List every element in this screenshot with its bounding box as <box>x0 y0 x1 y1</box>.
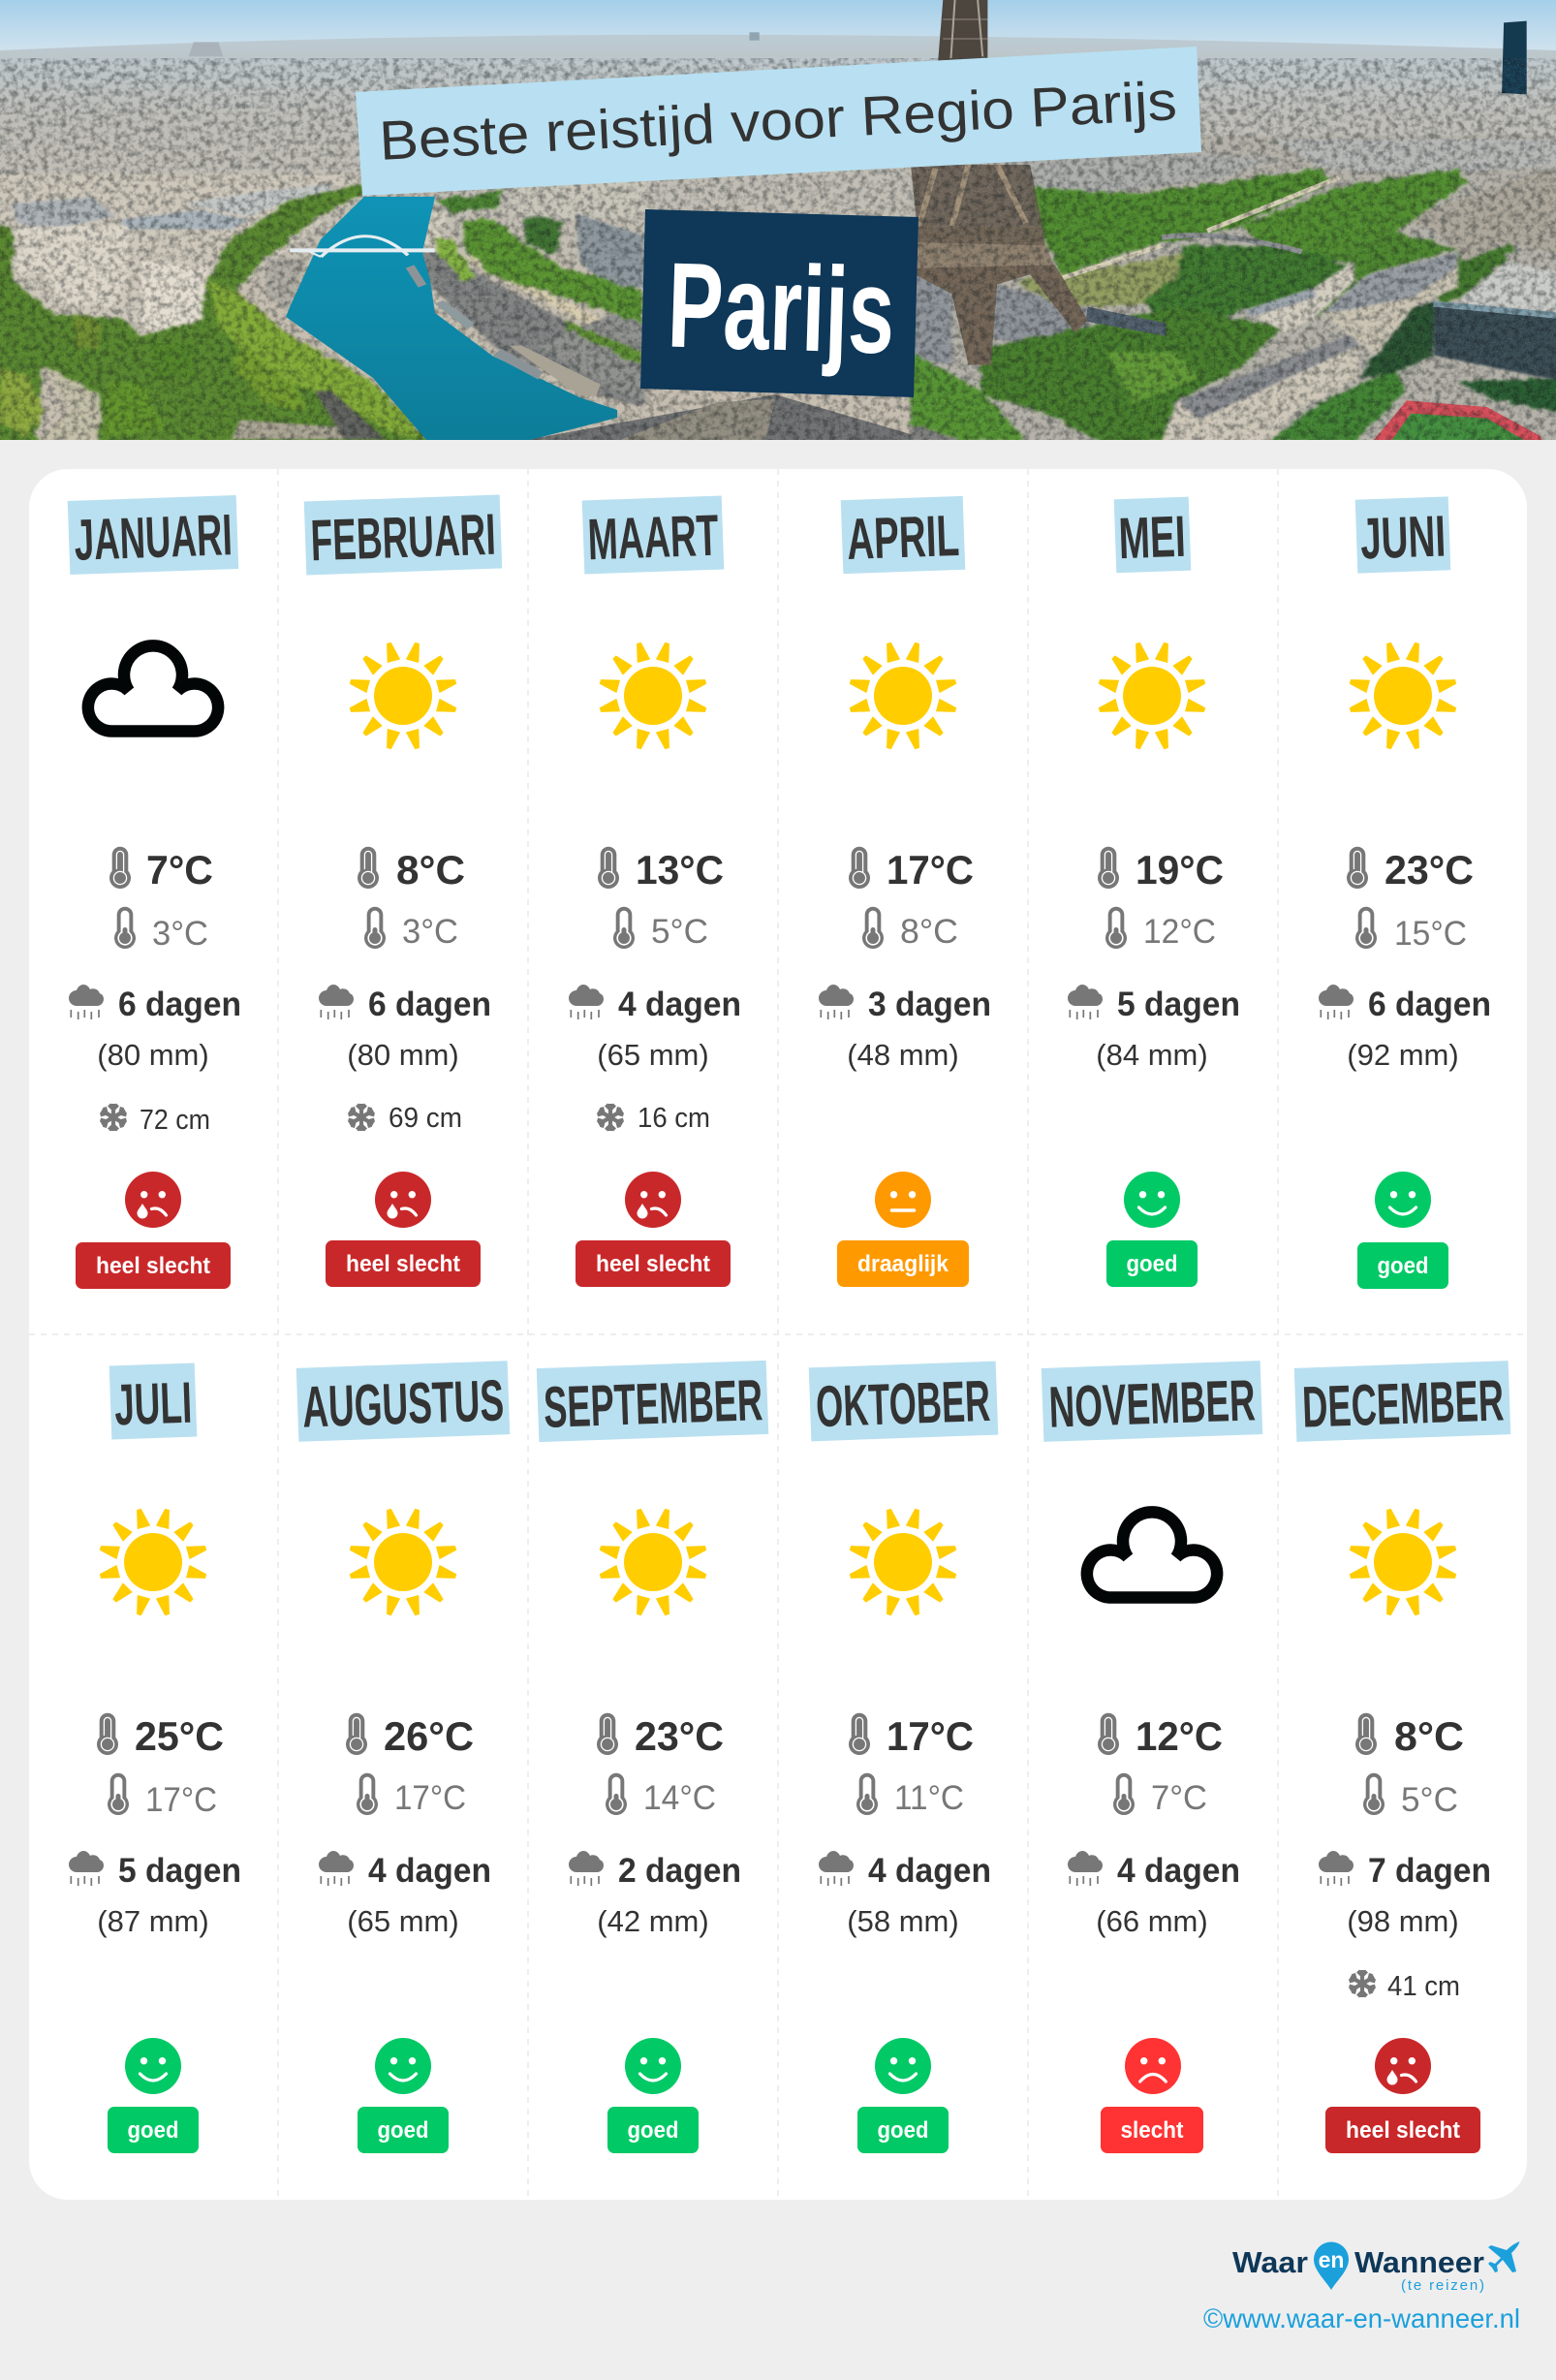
rating: goed: goed <box>878 2117 928 2144</box>
rating: goed: goed <box>1126 1251 1178 1277</box>
rainfall: (42 mm) <box>597 1904 709 1938</box>
icon: neutral face <box>875 1172 931 1228</box>
rating: goed <box>108 2107 199 2153</box>
title banner: Beste reistijd voor Regio Parijs <box>378 70 1178 172</box>
title banner <box>356 47 1201 196</box>
rating: heel slecht: heel slecht <box>346 1251 460 1277</box>
low temperature: 8°C <box>900 913 958 951</box>
high temperature <box>1098 847 1224 892</box>
rain days: 4 dagen <box>618 986 741 1023</box>
month heading: juli: JULI <box>113 1370 193 1437</box>
low temperature: 11°C <box>894 1779 964 1817</box>
high temperature: 25°C <box>135 1713 224 1759</box>
low temperature <box>862 907 958 951</box>
snow: 16 cm <box>638 1103 710 1134</box>
rating: draaglijk: draaglijk <box>857 1251 949 1277</box>
rain days: 4 dagen <box>1117 1852 1240 1890</box>
logo: Waar en Wanneer <box>1232 2241 1519 2294</box>
high temperature <box>358 847 465 892</box>
high temperature <box>849 847 974 892</box>
low temperature <box>606 1773 716 1817</box>
rain days <box>1319 985 1491 1023</box>
snow: 69 cm <box>389 1103 462 1134</box>
high temperature <box>1355 1713 1464 1759</box>
rating: heel slecht <box>1325 2107 1480 2153</box>
high temperature <box>598 847 724 892</box>
website credit: ©www.waar-en-wanneer.nl <box>1203 2303 1520 2333</box>
icon: cloud <box>88 645 218 732</box>
high temperature <box>97 1713 224 1759</box>
rainfall: (87 mm) <box>97 1904 209 1938</box>
icon: sun <box>349 642 457 750</box>
high temperature <box>849 1713 974 1759</box>
month heading: juni <box>1355 496 1450 574</box>
apartment blocks <box>1161 347 1360 440</box>
high temperature <box>1347 847 1474 892</box>
icon: happy face <box>1375 1172 1431 1228</box>
high temperature: 8°C <box>1394 1713 1464 1759</box>
rain days <box>69 1851 241 1890</box>
low temperature <box>1113 1773 1207 1817</box>
rating: goed <box>1106 1240 1198 1287</box>
month heading: april <box>841 496 965 574</box>
rating: goed: goed <box>128 2117 178 2144</box>
rating: goed: goed <box>1378 1253 1428 1279</box>
icon: sun <box>599 1508 707 1616</box>
rain days <box>819 1851 991 1890</box>
rating: heel slecht: heel slecht <box>96 1253 210 1279</box>
icon: airplane <box>1488 2241 1519 2272</box>
rating: heel slecht <box>326 1240 481 1287</box>
rating: slecht <box>1101 2107 1203 2153</box>
panel: maart <box>569 496 741 1287</box>
rating: slecht: slecht <box>1120 2117 1184 2144</box>
rain days: 6 dagen <box>368 986 491 1023</box>
low temperature <box>856 1773 964 1817</box>
low temperature: 17°C <box>145 1781 217 1819</box>
month heading: augustus <box>296 1361 510 1442</box>
rating: heel slecht <box>76 1242 231 1289</box>
panel: mei <box>1068 497 1240 1287</box>
rating: goed: goed <box>378 2117 428 2144</box>
running track <box>1372 400 1542 443</box>
icon: very sad face <box>125 1172 181 1228</box>
high temperature <box>109 847 213 892</box>
rain days: 6 dagen <box>118 986 241 1023</box>
rainfall: (80 mm) <box>97 1038 209 1072</box>
low temperature <box>364 907 458 951</box>
icon: happy face <box>875 2038 931 2094</box>
panel: september <box>537 1361 768 2153</box>
high temperature <box>1098 1713 1223 1759</box>
panel: juli <box>69 1362 241 2153</box>
hero photo: aerial view of Paris <box>0 0 1556 443</box>
rating: goed: goed <box>628 2117 678 2144</box>
high temperature: 19°C <box>1136 847 1224 892</box>
rain days: 4 dagen <box>368 1852 491 1890</box>
low temperature: 15°C <box>1394 915 1467 953</box>
high temperature: 7°C <box>146 847 213 892</box>
month heading: maart <box>582 496 724 574</box>
rainfall: (80 mm) <box>347 1038 459 1072</box>
white card panel <box>29 469 1527 2200</box>
logo: Waar en Wanneer: Wanneer <box>1354 2245 1484 2279</box>
low temperature: 7°C <box>1151 1779 1207 1817</box>
month heading: februari <box>304 494 502 576</box>
logo: Waar en Wanneer: Waar <box>1232 2245 1308 2279</box>
low temperature <box>1355 907 1467 953</box>
rain days <box>569 1851 741 1890</box>
rating: goed <box>358 2107 449 2153</box>
icon: happy face <box>1124 1172 1180 1228</box>
icon: happy face <box>375 2038 431 2094</box>
panel: augustus <box>296 1361 510 2153</box>
high temperature: 23°C <box>1385 847 1474 892</box>
month heading: augustus: AUGUSTUS <box>301 1367 505 1440</box>
month heading: september: SEPTEMBER <box>543 1367 763 1440</box>
month heading: februari: FEBRUARI <box>309 502 497 573</box>
high temperature: 8°C <box>396 847 465 892</box>
high temperature: 12°C <box>1136 1713 1223 1759</box>
month heading: maart: MAART <box>586 503 720 572</box>
low temperature: 3°C <box>152 915 208 953</box>
month heading: juni: JUNI <box>1359 503 1447 572</box>
high temperature: 13°C <box>636 847 724 892</box>
city name box <box>640 209 918 397</box>
month heading: juli <box>109 1362 197 1440</box>
icon: sun <box>599 642 707 750</box>
logo: Waar en Wanneer: en <box>1319 2247 1344 2272</box>
rain days: 2 dagen <box>618 1852 741 1890</box>
rain days: 5 dagen <box>1117 986 1240 1023</box>
month heading: april: APRIL <box>846 503 960 572</box>
icon: sun <box>1349 1508 1457 1616</box>
icon: sun <box>1098 642 1206 750</box>
low temperature: 5°C <box>651 913 708 951</box>
rain days <box>1068 1851 1240 1890</box>
icon: sun <box>849 1508 957 1616</box>
low temperature <box>613 907 708 951</box>
icon: sun <box>99 1508 207 1616</box>
rating: goed <box>857 2107 949 2153</box>
panel: december <box>1294 1361 1510 2153</box>
rain days <box>319 1851 491 1890</box>
rain days <box>1319 1851 1491 1890</box>
rainfall: (48 mm) <box>847 1038 959 1072</box>
rating: heel slecht: heel slecht <box>596 1251 710 1277</box>
icon: sun <box>1349 642 1457 750</box>
low temperature <box>108 1773 217 1819</box>
rain days <box>319 985 491 1023</box>
low temperature <box>1363 1773 1458 1819</box>
rainfall: (66 mm) <box>1096 1904 1208 1938</box>
snow: 41 cm <box>1387 1971 1460 2002</box>
low temperature <box>357 1773 466 1817</box>
low temperature <box>1105 907 1216 951</box>
road at the bottom centre <box>526 394 930 440</box>
month heading: mei <box>1114 497 1191 573</box>
rating: heel slecht <box>576 1240 731 1287</box>
panel: november <box>1042 1361 1262 2153</box>
low temperature: 14°C <box>643 1779 716 1817</box>
rainfall: (58 mm) <box>847 1904 959 1938</box>
panel: oktober <box>809 1362 998 2153</box>
rain days <box>1068 985 1240 1023</box>
high temperature <box>346 1713 474 1759</box>
month heading: november: NOVEMBER <box>1047 1367 1257 1440</box>
high temperature: 17°C <box>887 847 974 892</box>
rating: heel slecht: heel slecht <box>1346 2117 1460 2144</box>
low temperature: 3°C <box>402 913 458 951</box>
rain days <box>69 985 241 1023</box>
month heading: oktober: OKTOBER <box>815 1368 991 1439</box>
high temperature <box>597 1713 724 1759</box>
rating: goed <box>607 2107 699 2153</box>
rain days: 3 dagen <box>868 986 991 1023</box>
low temperature: 12°C <box>1143 913 1216 951</box>
logo: Waar en Wanneer: (te reizen) <box>1401 2277 1484 2294</box>
panel: februari <box>304 494 502 1287</box>
snow: 72 cm <box>140 1105 210 1136</box>
month heading: mei: MEI <box>1117 504 1187 571</box>
rain days: 6 dagen <box>1368 986 1491 1023</box>
low temperature: 5°C <box>1401 1781 1458 1819</box>
icon: very sad face <box>375 1172 431 1228</box>
rating: draaglijk <box>837 1240 969 1287</box>
boats and bridge on the Seine <box>290 236 601 395</box>
icon: cloud <box>1087 1512 1217 1598</box>
month heading: oktober <box>809 1362 998 1441</box>
rain days: 5 dagen <box>118 1852 241 1890</box>
month heading: september <box>537 1361 768 1442</box>
snow <box>1349 1970 1460 2002</box>
high temperature: 23°C <box>635 1713 724 1759</box>
rain days: 7 dagen <box>1368 1852 1491 1890</box>
photo mottling <box>0 58 1556 440</box>
panel: april <box>819 496 991 1287</box>
rainfall: (65 mm) <box>597 1038 709 1072</box>
rainfall: (65 mm) <box>347 1904 459 1938</box>
snow <box>100 1104 210 1136</box>
month heading: januari: JANUARI <box>73 502 233 573</box>
icon: sun <box>849 642 957 750</box>
month heading: januari <box>68 495 238 575</box>
icon: happy face <box>625 2038 681 2094</box>
low temperature: 17°C <box>394 1779 466 1817</box>
river Seine <box>286 197 617 440</box>
icon: happy face <box>125 2038 181 2094</box>
rainfall: (92 mm) <box>1347 1038 1459 1072</box>
icon: very sad face <box>625 1172 681 1228</box>
high temperature: 26°C <box>384 1713 474 1759</box>
high temperature: 17°C <box>887 1713 974 1759</box>
rain days <box>819 985 991 1023</box>
icon: sun <box>349 1508 457 1616</box>
Eiffel tower <box>911 165 1088 365</box>
panel: juni <box>1319 496 1491 1289</box>
low temperature <box>114 907 208 953</box>
snow <box>348 1103 462 1134</box>
month heading: november <box>1042 1361 1262 1442</box>
icon: sad face <box>1125 2038 1181 2094</box>
rating: goed <box>1357 1242 1448 1289</box>
snow <box>597 1103 710 1134</box>
icon: map pin <box>1314 2242 1349 2290</box>
panel: januari <box>68 495 241 1289</box>
rainfall: (84 mm) <box>1096 1038 1208 1072</box>
rain days: 4 dagen <box>868 1852 991 1890</box>
rainfall: (98 mm) <box>1347 1904 1459 1938</box>
rain days <box>569 985 741 1023</box>
icon: very sad face <box>1375 2038 1431 2094</box>
city name box: Parijs <box>666 238 896 379</box>
